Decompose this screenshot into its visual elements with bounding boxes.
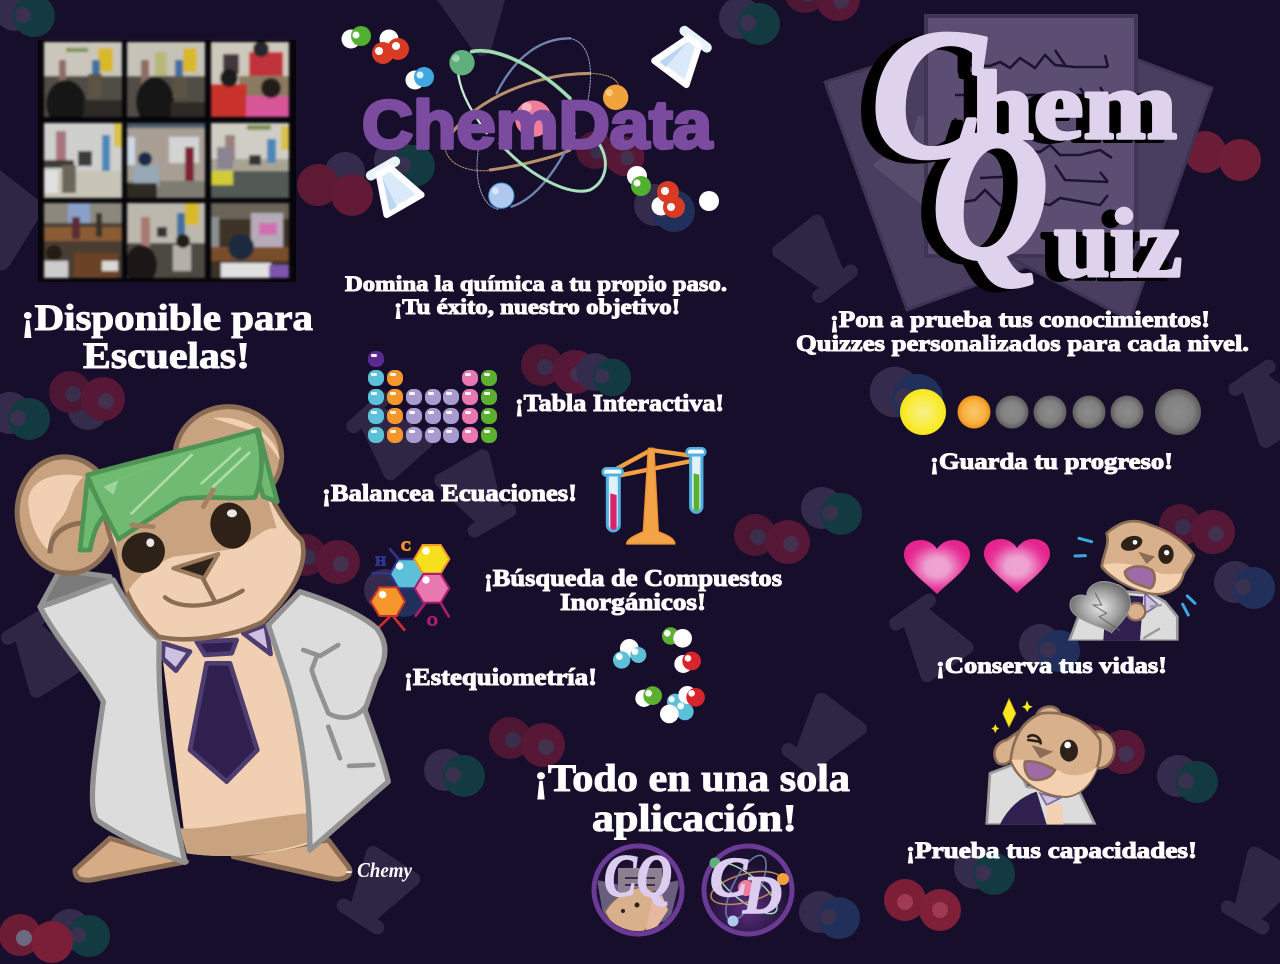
photo 8 [125,203,205,285]
title shadow [858,0,1169,301]
lab coat left [40,580,185,862]
nose and mouth [165,554,243,606]
title letters: uiz [1054,190,1182,298]
tie and collar [163,625,271,782]
tagline: Domina la química a tu propio paso. [345,271,727,296]
electrons [449,50,628,208]
tagline: ¡Tu éxito, nuestro objetivo! [394,294,680,319]
title shadow: uiz [1041,193,1169,301]
label: conserva tus vidas: ¡Conserva tus vidas! [936,653,1167,678]
eyes [115,497,257,580]
coat [987,763,1095,825]
quiz tagline: ¡Pon a prueba tus conocimientos! [830,307,1210,332]
heading: disponible para escuelas [21,298,313,377]
heading: todo en una sola aplicacion: ¡Todo en una sola [534,757,850,800]
photo grid [38,40,296,285]
icon: compound hexagons [371,540,449,631]
app icon: ChemData [704,846,792,934]
head [1102,521,1194,594]
title shadow: hem [958,55,1164,163]
title letters: Q [932,96,1048,297]
label: tabla interactiva: ¡Tabla Interactiva! [515,391,724,417]
body [160,623,310,856]
photo 9 [211,203,289,278]
mascot: sad with broken heart [1069,521,1195,641]
label: guarda tu progreso: ¡Guarda tu progreso! [930,449,1173,474]
feet [75,838,350,880]
label: estequiometria: ¡Estequiometría! [404,665,597,691]
progress orbs [900,389,1201,435]
photo 1 [44,42,122,128]
icon: compound hexagons: O [427,615,438,630]
photo 4 [44,123,122,198]
app icon: ChemData: D [742,865,782,925]
sparkles [1003,698,1016,727]
mascot: Chemy [10,407,388,880]
inner sleeve [40,570,110,607]
quiz papers [825,16,1212,320]
ear [1094,730,1116,770]
head [100,450,303,639]
heading: disponible para escuelas: Escuelas! [83,336,250,377]
quiz tagline: Quizzes personalizados para cada nivel. [796,331,1249,356]
coat details [303,645,373,766]
photo 7 [44,203,122,278]
icon: flask bottom left [363,154,421,215]
quiz tagline [796,307,1249,356]
label: balancea ecuaciones: ¡Balancea Ecuaciones! [322,481,577,507]
wordmark: ChemData [362,87,713,163]
face [1120,536,1142,551]
photo 6 [211,123,289,198]
title shadow: C [858,0,972,199]
head [1011,713,1100,797]
molecules around logo [342,26,719,218]
icon: compound hexagons: H [375,555,386,570]
photo 2 [127,42,205,127]
nucleus [515,100,552,137]
heading: todo en una sola aplicacion [534,757,850,840]
coat [1069,590,1177,641]
app icon: ChemQuiz: CQ [604,843,672,909]
mascot: winking thumbs up [987,698,1114,825]
paw [995,732,1018,764]
heading: todo en una sola aplicacion: aplicación! [592,797,797,840]
heading: disponible para escuelas: ¡Disponible para [21,298,313,339]
broken grey heart [1070,582,1130,633]
label: busqueda de compuestos [484,566,782,616]
icon: stoichiometry molecules [613,627,705,723]
icon: compound hexagons: C [401,540,411,555]
icon: balance with test tubes [603,448,705,544]
icon: flask top right [654,23,715,85]
ears [10,407,282,580]
face [1028,735,1041,743]
tagline [345,271,727,319]
title letters: hem [971,52,1177,160]
label: prueba tus capacidades: ¡Prueba tus capacidades! [906,838,1197,863]
title shadow: Q [918,99,1034,300]
logo: ChemQuiz [825,0,1212,320]
sweat marks [1075,538,1195,615]
label: busqueda de compuestos: ¡Búsqueda de Compuestos [484,566,782,592]
logo: ChemData [342,23,719,218]
title letters [872,0,1182,298]
lab coat right [268,592,388,850]
app icon: ChemQuiz [594,843,682,935]
photo 3 [211,41,289,117]
label: busqueda de compuestos: Inorgánicos! [560,590,706,616]
icon: hearts [904,539,1050,594]
app icon: ChemData: C [710,847,748,909]
icon: periodic table [368,351,497,443]
orbit rings [445,38,618,209]
signature: - Chemy [346,858,413,882]
photo 5 [127,123,205,198]
goggles [80,430,277,550]
